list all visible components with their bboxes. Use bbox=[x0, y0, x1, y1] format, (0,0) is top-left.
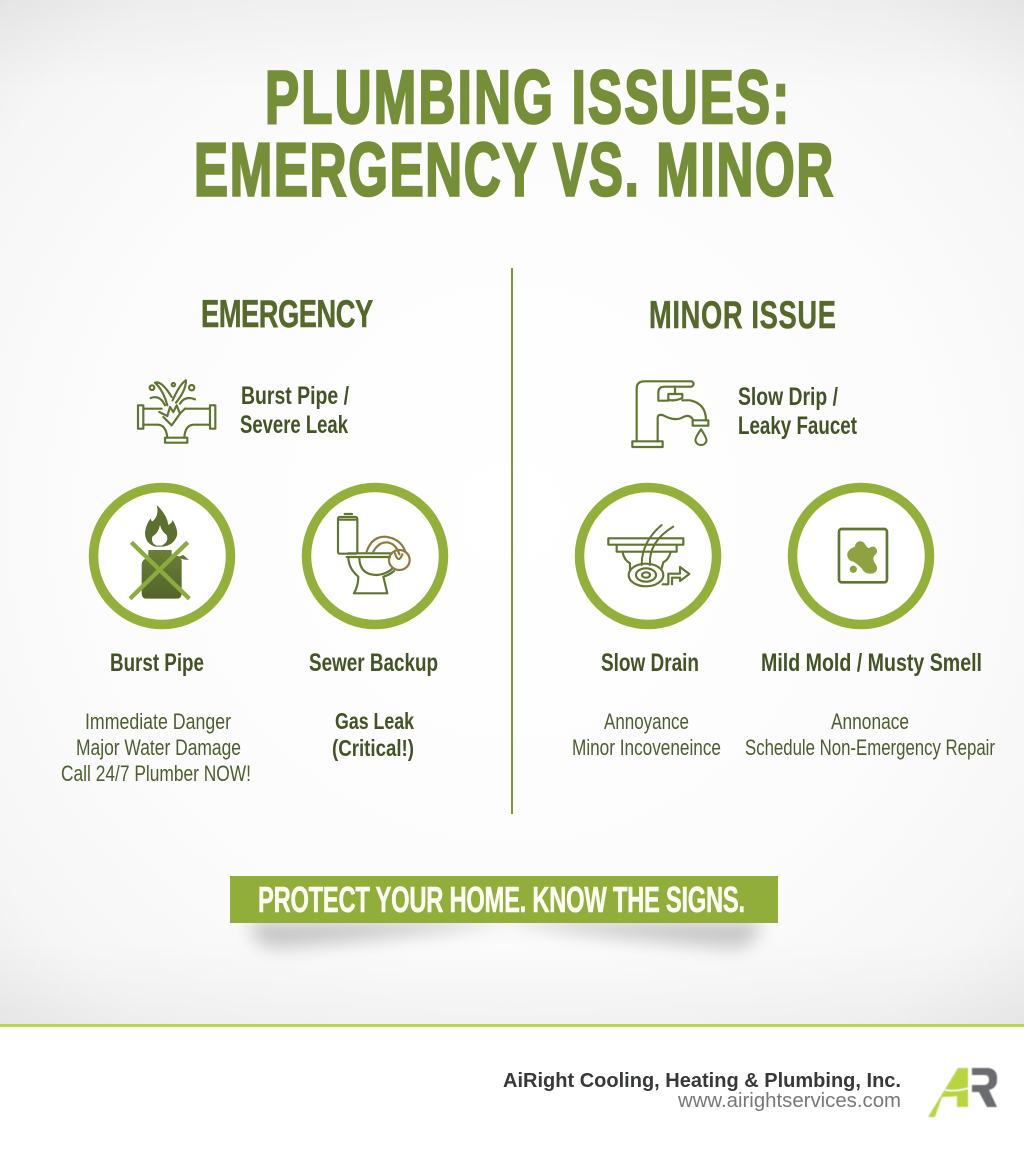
icon: gas can with flame crossed out bbox=[94, 488, 230, 624]
label: sewer backup: Sewer Backup bbox=[309, 649, 438, 677]
panel: emergency bbox=[61, 293, 444, 786]
company name and website bbox=[503, 1070, 901, 1112]
text: burst pipe details: Immediate Danger bbox=[85, 709, 231, 734]
icon: leaky faucet bbox=[632, 381, 708, 447]
icon: toilet bbox=[306, 488, 444, 624]
icon: clogged drain bbox=[580, 488, 716, 624]
heading: minor issue: MINOR ISSUE bbox=[649, 294, 836, 337]
text: gas leak critical: Gas Leak bbox=[335, 708, 414, 734]
item: slow drain bbox=[572, 488, 721, 760]
item: burst pipe bbox=[61, 488, 251, 786]
item: sewer backup bbox=[306, 488, 444, 761]
company name and website: www.airightservices.com bbox=[677, 1090, 901, 1112]
label: slow drip leaky faucet: Slow Drip / bbox=[738, 383, 838, 411]
label: slow drain: Slow Drain bbox=[601, 649, 699, 677]
item: mild mold bbox=[745, 488, 995, 760]
icon: burst pipe bbox=[138, 380, 215, 443]
text: burst pipe details: Major Water Damage bbox=[76, 735, 241, 760]
logo: AR bbox=[928, 1068, 997, 1117]
label: slow drip leaky faucet bbox=[738, 383, 857, 440]
text: mild mold details bbox=[745, 709, 995, 760]
label: burst pipe severe leak bbox=[240, 382, 349, 439]
label: slow drip leaky faucet: Leaky Faucet bbox=[738, 412, 857, 440]
text: gas leak critical: (Critical!) bbox=[332, 735, 414, 761]
footer bbox=[0, 1024, 1024, 1154]
center divider bbox=[511, 268, 513, 814]
label: burst pipe: Burst Pipe bbox=[110, 649, 204, 677]
text: gas leak critical bbox=[332, 708, 414, 761]
banner: call to action: PROTECT YOUR HOME. KNOW THE SIGNS. bbox=[258, 880, 745, 920]
label: burst pipe severe leak: Severe Leak bbox=[240, 411, 348, 439]
company name and website: AiRight Cooling, Heating & Plumbing, Inc. bbox=[503, 1070, 901, 1092]
text: slow drain details: Annoyance bbox=[604, 709, 689, 734]
title bbox=[194, 55, 833, 212]
label: burst pipe severe leak: Burst Pipe / bbox=[241, 382, 349, 410]
icon: mold patch bbox=[792, 488, 930, 624]
banner: call to action bbox=[230, 876, 778, 948]
heading: emergency: EMERGENCY bbox=[201, 293, 373, 336]
text: burst pipe details: Call 24/7 Plumber NOW! bbox=[61, 761, 251, 786]
text: mild mold details: Annonace bbox=[831, 709, 909, 734]
panel: minor issue bbox=[572, 294, 995, 760]
title: EMERGENCY VS. MINOR bbox=[194, 128, 833, 212]
text: burst pipe details bbox=[61, 709, 251, 786]
text: slow drain details: Minor Incoveneince bbox=[572, 735, 721, 760]
title: PLUMBING ISSUES: bbox=[265, 55, 789, 139]
text: slow drain details bbox=[572, 709, 721, 760]
